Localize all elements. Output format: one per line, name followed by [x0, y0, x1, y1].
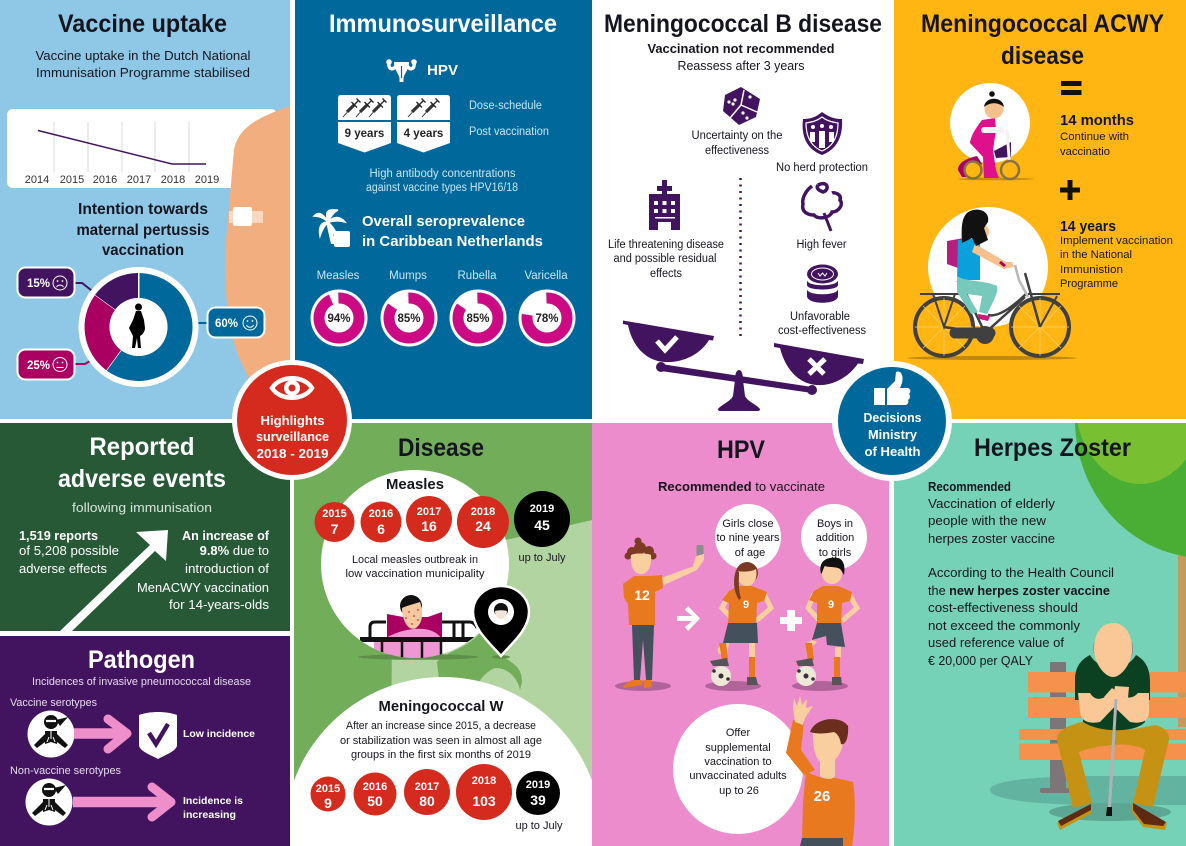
speech bubble: boys: Boys in — [817, 518, 853, 530]
labels: dose schedule: Dose-schedule — [469, 100, 542, 112]
text: uptake summary: Vaccine uptake in the Dutch National — [36, 48, 251, 63]
icon: shield check — [139, 712, 177, 759]
bubble: 2015: 2015 — [316, 783, 340, 795]
text: not recommended: Vaccination not recommended — [648, 41, 835, 56]
text: decisions: Ministry — [868, 427, 918, 442]
bubble: 2018 — [456, 764, 512, 820]
text: recommended: herpes zoster vaccine — [928, 531, 1055, 546]
icon: person with lungs — [28, 710, 74, 758]
text: recommended — [928, 479, 1056, 546]
label: high fever: High fever — [796, 239, 847, 251]
bubble: 2015 — [314, 502, 354, 542]
badge: highlights surveillance — [232, 360, 352, 480]
illustration: child on tricycle — [950, 83, 1034, 180]
text: health council: used reference value of — [928, 635, 1064, 650]
heading: maternal pertussis — [76, 201, 210, 259]
bubble: 2019 — [514, 491, 570, 547]
bubble: 2015: 7 — [331, 521, 339, 537]
text: decisions — [864, 410, 922, 459]
text: 14 years — [1060, 218, 1173, 290]
icon: dice — [723, 87, 760, 125]
divider: dotted line — [739, 178, 742, 336]
heading: maternal pertussis: vaccination — [102, 242, 184, 259]
icon: pregnant woman — [129, 304, 145, 348]
panel: herpes zoster — [894, 423, 1186, 846]
text: 14 years: Programme — [1060, 278, 1118, 290]
illustration: balance scale — [623, 320, 864, 411]
panel: meningococcal ACWY — [894, 0, 1186, 419]
icon: plus — [1060, 180, 1080, 200]
bubble: 2017 — [406, 496, 452, 542]
heading: maternal pertussis: maternal pertussis — [76, 222, 210, 239]
text: life threatening: effects — [650, 268, 682, 280]
bubble: 2018 — [457, 496, 509, 548]
donut: mumps 85%: 85% — [397, 313, 421, 325]
donut: rubella 85% — [450, 270, 506, 346]
text: after an increase: After an increase since 2015, a decrease — [346, 720, 536, 732]
heading: overall seroprevalence — [362, 213, 543, 250]
donut: measles 94%: 94% — [327, 313, 351, 325]
panel: immunosurveillance — [295, 0, 592, 419]
illustration: arm with bandage — [226, 106, 290, 402]
text: decisions: of Health — [864, 444, 921, 459]
text: offer supplemental: supplemental — [705, 742, 771, 754]
text: health council: the new herpes zoster vaccine — [928, 583, 1110, 598]
group: measles — [314, 470, 570, 660]
text: local outbreak: low vaccination municipality — [346, 568, 485, 580]
donut: rubella 85%: 85% — [466, 313, 490, 325]
text: incidences: Incidences of invasive pneumococcal disease — [32, 676, 251, 688]
badge: 9 years: 9 years — [345, 128, 384, 140]
icon: uterus — [386, 59, 417, 82]
text: following immunisation: following immunisation — [72, 500, 212, 515]
donut: varicella 78%: 78% — [535, 313, 559, 325]
bubble: 2019 — [516, 771, 560, 815]
text: increase of 9.8%: MenACWY vaccination — [137, 580, 269, 595]
arrow: to low incidence — [74, 719, 127, 749]
text: 14 months — [1060, 112, 1134, 158]
text: life threatening — [608, 239, 724, 280]
bubble: 2017: 2017 — [417, 506, 441, 518]
arrow: increase — [60, 530, 168, 631]
text: antibody concentrations: High antibody concentrations — [370, 168, 516, 180]
bubble: 2016 — [360, 502, 402, 542]
line chart: uptake 2014-2019: 2017 — [127, 174, 151, 186]
badge: 15%: 15% — [27, 278, 50, 290]
donut: varicella 78%: Varicella — [524, 270, 568, 282]
speech bubble: girls — [715, 504, 781, 570]
text: offer supplemental: up to 26 — [719, 785, 759, 797]
bubble: 2015 — [310, 776, 346, 812]
text: recommended: Recommended to vaccinate — [658, 479, 825, 494]
text: increase of 9.8%: for 14-years-olds — [169, 597, 270, 612]
text: uncertainty: Uncertainty on the — [692, 130, 782, 142]
heading: meningococcal ACWY — [921, 10, 1164, 70]
text: uncertainty: effectiveness — [705, 145, 769, 157]
heading: pathogen: Pathogen — [88, 646, 195, 674]
bubble: 2015: 2015 — [322, 508, 347, 520]
line chart: uptake 2014-2019: 2016 — [93, 174, 117, 186]
text: recommended: Recommended — [928, 479, 1011, 494]
bubble: 2017: 16 — [421, 518, 437, 534]
text: 14 years: in the National — [1060, 249, 1132, 261]
bubble: 2018: 2018 — [471, 506, 495, 518]
donut: varicella 78% — [518, 270, 576, 346]
bubble: 2018: 2018 — [472, 775, 496, 787]
label: no herd protection: No herd protection — [776, 162, 868, 174]
illustration: man 26 waving — [673, 696, 855, 846]
text: not recommended: Reassess after 3 years — [678, 58, 805, 73]
text: highlights: surveillance — [256, 429, 329, 444]
speech bubble: girls: to nine years — [717, 532, 780, 544]
illustration: child in bed — [358, 595, 510, 660]
speech bubble: boys: addition — [816, 532, 854, 544]
text: health council: not exceed the commonly — [928, 618, 1081, 633]
heading: herpes zoster: Herpes Zoster — [974, 434, 1131, 462]
text: 14 years: 14 years — [1060, 218, 1116, 235]
line chart: uptake 2014-2019: 2018 — [161, 174, 185, 186]
heading: vaccine uptake: Vaccine uptake — [58, 10, 227, 38]
text: life threatening: Life threatening disease — [608, 239, 724, 251]
text: cost-effectiveness: cost-effectiveness — [778, 325, 866, 337]
label: incidence increasing: Incidence is — [183, 795, 243, 807]
line chart: uptake 2014-2019 — [7, 109, 277, 188]
heading: meningococcal B: Meningococcal B disease — [604, 10, 882, 38]
icon: cross — [809, 359, 825, 374]
text: not recommended — [648, 41, 835, 73]
bubble: 2016: 50 — [367, 793, 383, 809]
bubble: 2016: 2016 — [363, 781, 387, 793]
icon: person with lungs — [26, 778, 72, 826]
text: after an increase: or stabilization was seen in almost all age — [340, 735, 542, 747]
heading: measles: Measles — [386, 476, 444, 493]
text: 14 months: Continue with — [1060, 131, 1129, 143]
heading: meningococcal ACWY: Meningococcal ACWY — [921, 10, 1164, 38]
illustration: elderly man on bench — [990, 623, 1186, 830]
line chart: uptake 2014-2019: 2019 — [195, 174, 219, 186]
label: non-vaccine serotypes: Non-vaccine serotypes — [10, 765, 121, 777]
text: 14 months: 14 months — [1060, 112, 1134, 129]
bubble: 2016 — [354, 772, 396, 816]
text: increase of 9.8%: introduction of — [185, 561, 269, 576]
text: uptake summary: Immunisation Programme stabilised — [36, 65, 250, 80]
speech bubble: boys: to girls — [819, 547, 852, 559]
illustration: girl 9 with ball — [705, 562, 771, 691]
text: reports: of 5,208 possible — [19, 543, 119, 558]
illustration: tree — [1075, 423, 1186, 727]
heading: HPV: HPV — [717, 436, 765, 464]
heading: adverse events: adverse events — [58, 465, 226, 493]
panel: HPV — [592, 423, 889, 846]
text: local outbreak — [346, 554, 485, 580]
label: incidence increasing — [183, 795, 243, 821]
text: after an increase — [340, 720, 542, 761]
illustration: girl 12 with phone: 12 — [634, 587, 650, 603]
text: local outbreak: Local measles outbreak in — [352, 554, 478, 566]
labels: dose schedule — [469, 100, 549, 138]
text: increase of 9.8%: 9.8% due to — [200, 543, 269, 558]
arrow: to increasing — [73, 787, 171, 817]
heading: maternal pertussis: Intention towards — [78, 201, 208, 218]
badge: 60%: 60% — [215, 318, 238, 330]
map: light region — [392, 520, 592, 780]
text: uncertainty — [692, 130, 782, 157]
text: offer supplemental: vaccination to — [704, 756, 772, 768]
badge: 15% — [18, 268, 74, 298]
panel: reported adverse events — [0, 423, 290, 631]
heading: meningococcal ACWY: disease — [1001, 42, 1084, 70]
bubble: 2015: 9 — [324, 795, 332, 811]
text: health council: According to the Health Council — [928, 565, 1114, 580]
speech bubble: girls: Girls close — [722, 518, 774, 530]
text: reports: adverse effects — [19, 561, 107, 576]
text: highlights: 2018 - 2019 — [256, 446, 328, 461]
speech bubble: girls: of age — [735, 547, 765, 559]
group: meningococcal W — [294, 677, 592, 846]
bubble: 2019: 2019 — [526, 779, 550, 791]
panel: vaccine uptake — [0, 0, 290, 419]
text: reports — [19, 528, 119, 576]
text: increase of 9.8% — [137, 528, 270, 612]
labels: dose schedule: Post vaccination — [469, 126, 549, 138]
illustration: girl 12 with phone — [615, 538, 704, 691]
bubble: 2016: 2016 — [369, 508, 393, 520]
line chart: uptake 2014-2019: 2014 — [25, 174, 49, 186]
badge: 4 years: 4 years — [404, 128, 443, 140]
text: highlights — [256, 413, 329, 461]
donut: rubella 85%: Rubella — [458, 270, 497, 282]
text: decisions: Decisions — [864, 410, 922, 425]
label: up to July: up to July — [515, 820, 563, 832]
bubble: 2018: 24 — [475, 518, 491, 534]
bubble: 2019: 45 — [534, 517, 550, 533]
speech bubble: boys — [801, 504, 867, 570]
bubble: 2019: 39 — [530, 792, 546, 808]
icon: arrow — [677, 606, 700, 631]
label: incidence increasing: increasing — [183, 809, 236, 821]
donut chart: intention — [75, 267, 207, 387]
bubble: 2019: 2019 — [530, 503, 554, 515]
text: 14 years: Immunistion — [1060, 264, 1123, 276]
illustration: girl 9 with ball: 9 — [743, 599, 749, 611]
icon: eye — [272, 378, 312, 398]
badge: 25% — [18, 350, 74, 380]
text: highlights: Highlights — [260, 413, 324, 428]
text: after an increase: groups in the first six months of 2019 — [351, 749, 531, 761]
donut: mumps 85% — [380, 270, 438, 346]
text: antibody concentrations: against vaccine types HPV16/18 — [366, 182, 518, 194]
panel: disease — [294, 423, 592, 846]
illustration: boy 9 with ball: 9 — [828, 599, 834, 611]
bubble: 2017: 2017 — [415, 781, 439, 793]
icon: palm tree — [314, 210, 350, 247]
panel: pathogen — [0, 636, 290, 846]
heading: overall seroprevalence: in Caribbean Netherlands — [362, 233, 543, 250]
icon: plus — [780, 610, 802, 631]
text: increase of 9.8%: An increase of — [182, 528, 270, 543]
bubble: 2017: 80 — [419, 793, 435, 809]
badge: 60% — [208, 308, 264, 338]
text: cost-effectiveness: Unfavorable — [790, 311, 850, 323]
text: offer supplemental — [689, 727, 787, 797]
badge: 9 years — [338, 95, 391, 152]
badge: 4 years — [397, 95, 450, 152]
icon: shield with people — [803, 112, 842, 155]
label: vaccine serotypes: Vaccine serotypes — [10, 697, 97, 709]
text: recommended: people with the new — [928, 513, 1047, 528]
heading: disease: Disease — [398, 434, 484, 462]
text: health council — [928, 565, 1114, 668]
badge: 25%: 25% — [27, 360, 50, 372]
heading: adverse events: Reported — [90, 433, 194, 461]
donut: measles 94%: Measles — [317, 270, 360, 282]
badge: decisions ministry of health — [832, 361, 952, 481]
panel: meningococcal B — [604, 10, 882, 411]
illustration: boy 9 with ball — [792, 558, 857, 691]
label: low incidence: Low incidence — [183, 728, 255, 740]
text: recommended: Vaccination of elderly — [928, 496, 1056, 511]
line chart: uptake 2014-2019: 2015 — [60, 174, 84, 186]
icon: map pin — [473, 586, 529, 656]
heading: meningococcal W: Meningococcal W — [378, 698, 504, 715]
icon: thumbs up — [874, 371, 910, 405]
text: health council: cost-effectiveness should — [928, 600, 1078, 615]
icon: coins — [807, 264, 838, 303]
illustration: man 26 waving: 26 — [814, 788, 830, 805]
text: life threatening: and possible residual — [614, 253, 716, 265]
text: 14 years: Implement vaccination — [1060, 235, 1173, 247]
text: 14 months: vaccinatio — [1060, 146, 1110, 158]
text: offer supplemental: Offer — [726, 727, 750, 739]
icon: check — [657, 337, 677, 350]
donut: mumps 85%: Mumps — [389, 270, 427, 282]
text: health council: € 20,000 per QALY — [928, 653, 1033, 668]
label: up to July: up to July — [518, 552, 566, 564]
bubble: 2016: 6 — [377, 521, 385, 537]
icon: hospital — [649, 180, 680, 230]
heading: overall seroprevalence: Overall seroprevalence — [362, 213, 525, 230]
illustration: girl on bicycle — [907, 207, 1077, 360]
text: cost-effectiveness — [778, 311, 866, 337]
bubble: 2017 — [404, 769, 450, 815]
text: antibody concentrations — [366, 168, 518, 194]
icon: fever — [803, 184, 841, 231]
icon: equals — [1061, 81, 1082, 95]
text: offer supplemental: unvaccinated adults — [689, 770, 787, 782]
heading: immunosurveillance: Immunosurveillance — [329, 10, 557, 38]
bubble: 2018: 103 — [472, 793, 496, 809]
text: uptake summary — [36, 48, 251, 80]
text: reports: 1,519 reports — [19, 528, 98, 543]
donut: measles 94% — [310, 270, 368, 346]
heading: adverse events — [58, 433, 226, 493]
label: HPV: HPV — [427, 62, 458, 79]
